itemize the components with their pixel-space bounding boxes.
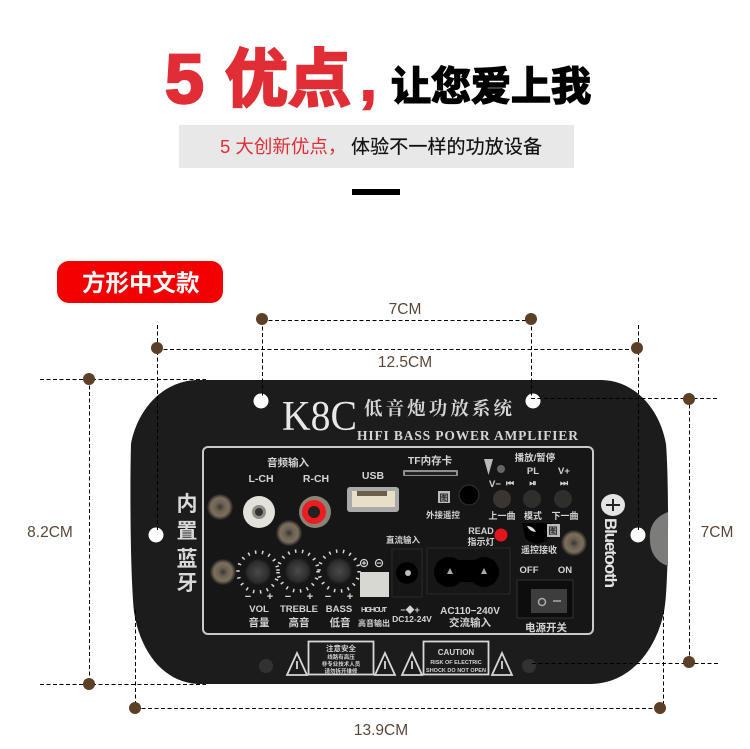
- playback controls: ⏮: [506, 478, 514, 488]
- knobs: BASS: [326, 604, 352, 615]
- dimension: 12.5CM: 12.5CM: [378, 354, 432, 371]
- playback controls: ⏭: [560, 478, 569, 488]
- knobs: 高音: [288, 616, 310, 629]
- title: 5: [165, 40, 204, 118]
- badge: 方形中文款: 方形中文款: [82, 269, 200, 296]
- DC input: [386, 535, 422, 597]
- high out terminal: ⊖: [374, 558, 384, 570]
- safety notices: [287, 642, 512, 675]
- USB port: [347, 470, 399, 512]
- remote receiver: 遥控接收: [521, 544, 557, 555]
- safety text: 注意安全: [326, 643, 356, 653]
- high out terminal: 高音输出: [358, 618, 390, 628]
- side label: 内置蓝牙: 置: [176, 520, 198, 543]
- board heading: [282, 394, 578, 443]
- board heading: HIFI BASS POWER AMPLIFIER: [357, 428, 578, 443]
- side label: Bluetooth: Bluetooth: [601, 518, 620, 588]
- DC label: [392, 605, 432, 624]
- dimension: 8.2CM: [27, 373, 206, 690]
- playback controls: 上一曲: [488, 510, 516, 521]
- knobs: 音量: [248, 616, 270, 629]
- right edge notch: [650, 512, 668, 566]
- dimension: 13.9CM: 13.9CM: [354, 722, 408, 739]
- high out terminal: [358, 558, 390, 628]
- high out terminal: HIGH OUT: [361, 605, 387, 614]
- knobs: [238, 551, 359, 629]
- audio input jacks: R-CH: [303, 473, 329, 485]
- knobs: +: [267, 591, 273, 603]
- DC label: −◆+: [400, 605, 420, 615]
- badge: 方形中文款: [57, 261, 223, 303]
- audio input jacks: [207, 456, 587, 585]
- amplifier board: [130, 380, 668, 684]
- dimension: 7CM right: [531, 393, 733, 668]
- side label: Bluetooth: [601, 494, 625, 588]
- knobs: −: [285, 591, 291, 603]
- playback controls: 下一曲: [551, 510, 579, 521]
- title: [165, 40, 591, 118]
- safety text: [322, 643, 361, 675]
- AC label: 交流输入: [449, 616, 491, 629]
- remote input: [426, 485, 479, 520]
- audio input jacks: 音频输入: [267, 456, 309, 469]
- safety text: 线路有高压: [327, 653, 355, 661]
- subtitle band: 体验不一样的功放设备: [351, 136, 542, 158]
- playback controls: V−: [489, 479, 501, 490]
- safety text: 请勿拆开维修: [324, 667, 358, 675]
- read indicator: [467, 526, 508, 547]
- playback controls: 播放/暂停: [515, 452, 556, 464]
- board body: [130, 380, 668, 684]
- power switch: OFF: [520, 565, 539, 576]
- playback controls: [484, 452, 579, 521]
- title: 让您爱上我: [391, 65, 591, 109]
- remote receiver: 图: [548, 526, 558, 536]
- caution text: RISK OF ELECTRIC: [430, 660, 482, 666]
- DC label: DC12-24V: [392, 614, 432, 624]
- subtitle band: 5 大创新优点，: [220, 136, 346, 157]
- dimension: 8.2CM: 8.2CM: [27, 524, 73, 541]
- side label: 内置蓝牙: [176, 493, 198, 595]
- high out terminal: ⊕: [358, 558, 370, 570]
- power switch: 电源开关: [525, 621, 567, 634]
- dimension: 13.9CM: [129, 610, 666, 739]
- audio input jacks: L-CH: [248, 473, 274, 485]
- read indicator: 指示灯: [467, 536, 495, 547]
- dimension: 12.5CM: [151, 325, 643, 530]
- subtitle band: [179, 125, 574, 168]
- side label: 内置蓝牙: 牙: [176, 572, 198, 595]
- playback controls: PL: [527, 466, 539, 477]
- title: ,: [360, 46, 377, 113]
- dimension: 7CM top: [256, 301, 537, 398]
- power switch: ON: [558, 565, 572, 576]
- knobs: +: [307, 591, 313, 603]
- side label: 内置蓝牙: 蓝: [176, 548, 198, 571]
- AC label: AC110−240V: [440, 606, 500, 617]
- knobs: +: [347, 591, 353, 603]
- USB port: USB: [362, 470, 385, 482]
- divider bar: [352, 189, 400, 195]
- read indicator: READ: [468, 526, 494, 536]
- side label: 内置蓝牙: 内: [176, 493, 198, 516]
- TF card slot: [403, 454, 458, 476]
- title: 优点: [225, 45, 351, 115]
- knobs: VOL: [249, 604, 269, 615]
- playback controls: 模式: [524, 510, 542, 521]
- knobs: TREBLE: [280, 604, 318, 615]
- knobs: −: [325, 591, 331, 603]
- remote receiver: [521, 523, 560, 555]
- safety text: 非专业技术人员: [322, 660, 361, 668]
- control panel outline: [203, 447, 593, 634]
- AC label: [440, 606, 500, 629]
- dimension: 7CM top: 7CM: [389, 301, 421, 318]
- remote input: 外接遥控: [426, 510, 460, 520]
- board heading: 低音炮功放系统: [364, 395, 513, 421]
- remote input: 图: [439, 493, 449, 503]
- knobs: −: [245, 591, 251, 603]
- caution text: CAUTION: [438, 648, 474, 657]
- AC socket: [427, 548, 510, 594]
- playback controls: ⏯: [529, 478, 537, 488]
- TF card slot: TF内存卡: [408, 454, 453, 467]
- playback controls: V+: [558, 466, 570, 477]
- caution text: [426, 648, 486, 674]
- caution text: SHOCK DO NOT OPEN: [426, 668, 486, 674]
- board heading: K8C: [282, 394, 357, 440]
- knobs: 低音: [330, 616, 350, 629]
- dimension: 7CM right: 7CM: [701, 524, 733, 541]
- DC input: 直流输入: [386, 535, 420, 545]
- mounting holes: [148, 394, 646, 673]
- power switch: [517, 565, 573, 634]
